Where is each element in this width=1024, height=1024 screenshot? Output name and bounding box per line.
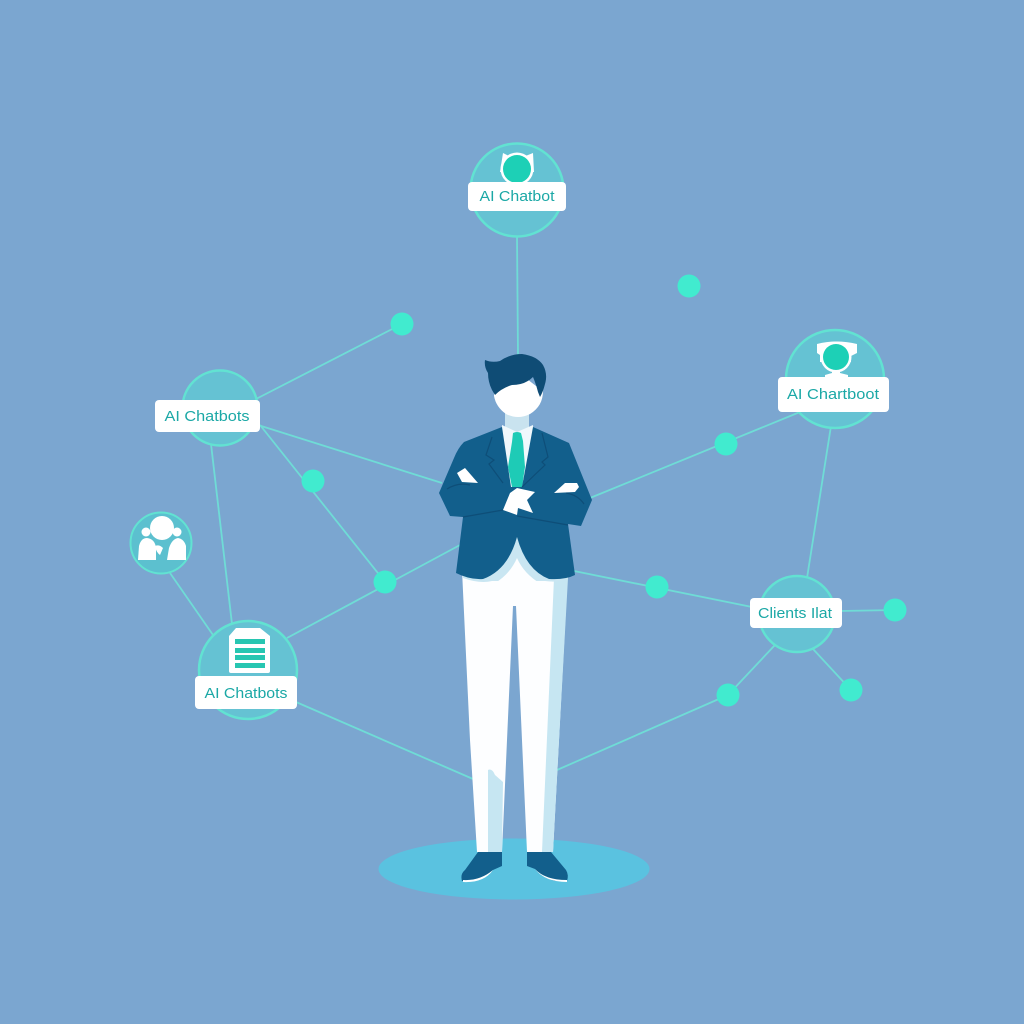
label: AI Chatbots: AI Chatbots — [164, 408, 250, 425]
trousers — [462, 570, 568, 852]
node: document AI Chatbots — [195, 621, 297, 719]
white shirt front below jacket — [495, 558, 541, 584]
icon: group of people — [138, 516, 186, 560]
floor ellipse — [378, 838, 650, 900]
hair — [485, 354, 546, 397]
label: Clients Ilat: Clients Ilat — [758, 605, 833, 622]
face — [494, 372, 543, 417]
necktie — [508, 432, 525, 487]
jacket lapels — [447, 433, 584, 525]
right hand — [554, 483, 579, 493]
neck — [505, 410, 529, 436]
floating network dots — [302, 274, 906, 706]
icon: bot head — [500, 152, 534, 186]
node: left AI Chatbots — [155, 370, 260, 446]
node: Clients Ilat — [750, 576, 842, 652]
crossed cuffs — [503, 488, 535, 515]
label: AI Chatbots: AI Chatbots — [204, 685, 288, 702]
jacket — [439, 427, 592, 579]
network connector lines — [170, 236, 895, 779]
label: AI Chatbot: AI Chatbot — [480, 188, 555, 205]
icon: document list — [229, 628, 270, 673]
label: AI Chartboot: AI Chartboot — [787, 386, 880, 403]
shirt tail under jacket — [463, 530, 568, 582]
node: people icon — [130, 512, 192, 574]
left hand — [457, 468, 478, 483]
node: top AI Chatbot — [468, 144, 566, 236]
right shoe — [527, 852, 568, 882]
left shoe — [461, 852, 502, 882]
shirt collar — [501, 425, 535, 490]
businessman figure — [439, 354, 592, 882]
node: right AI Chartboot — [778, 330, 889, 428]
icon: headset bot — [817, 342, 857, 378]
